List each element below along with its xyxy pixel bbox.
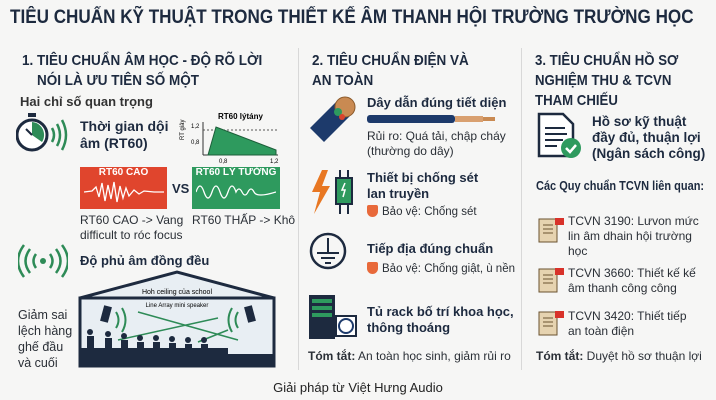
captions: difficult to róc focus	[80, 228, 182, 242]
panel: records	[535, 52, 705, 363]
icon: cable	[310, 96, 356, 142]
text: surge	[367, 170, 478, 201]
captions	[80, 213, 183, 242]
icon: stopwatch	[16, 113, 68, 152]
icon: coverage waves	[18, 244, 68, 278]
protect 1: Bảo vệ: Chống sét	[382, 206, 477, 218]
summary 2: Tóm tắt: An toàn học sinh, giảm rủi ro	[308, 349, 511, 363]
text: reduce deviation: lệch hàng	[18, 324, 72, 338]
item 3: TCVN 3420: Thiết tiếp	[568, 309, 687, 323]
box: RT60 ideal	[192, 167, 280, 209]
box: RT60 high	[80, 167, 167, 209]
vs: VS	[172, 181, 189, 196]
heading 3: THAM CHIẾU	[535, 92, 618, 109]
captions: RT60 CAO -> Vang	[80, 213, 183, 227]
chart: RT60: 1,2	[191, 124, 200, 130]
text: surge: Thiết bị chống sét	[367, 170, 478, 185]
title: TIÊU CHUẨN KỸ THUẬT TRONG THIẾT KẾ ÂM THANH HỘI TRƯỜNG TRƯỜNG HỌC	[10, 7, 694, 28]
text: records	[592, 114, 705, 161]
icon: document check	[538, 112, 581, 158]
summary 3: Tóm tắt: Duyệt hồ sơ thuận lợi	[536, 349, 702, 363]
text: RT60: âm (RT60)	[80, 135, 148, 151]
footer: Giải pháp từ Việt Hưng Audio	[273, 380, 443, 395]
box: RT60 high: RT60 CAO	[99, 167, 148, 178]
protect 2: Bảo vệ: Chống giật, ù nền	[382, 263, 515, 275]
heading 1: 1. TIÊU CHUẨN ÂM HỌC - ĐỘ RÕ LỜI	[22, 52, 262, 69]
icon: rack	[309, 295, 357, 339]
heading 3	[535, 52, 678, 109]
text: surge: lan truyền	[367, 186, 429, 201]
heading 3: NGHIỆM THU & TCVN	[535, 72, 671, 89]
heading 2: AN TOÀN	[312, 72, 373, 89]
text: rack: Tủ rack bố trí khoa học,	[367, 304, 514, 319]
panel: electrical: Rủi ro: Quá tải, chập cháy (thường do dây)	[367, 129, 506, 158]
panel: electrical	[308, 52, 515, 363]
diagram: hall: Hoh ceiling của school	[142, 288, 212, 296]
text: TCVN heading: Các Quy chuẩn TCVN liên quan:	[536, 179, 704, 193]
text: records: (Ngân sách công)	[592, 146, 705, 161]
text: RT60	[80, 118, 168, 151]
icon: ground	[310, 232, 346, 270]
text: coverage: Độ phủ âm đồng đều	[80, 253, 209, 268]
heading 2	[312, 52, 469, 89]
text: reduce deviation: ghế đầu	[18, 340, 63, 354]
chart: RT60	[180, 112, 279, 165]
panel: acoustics	[16, 52, 295, 278]
text: records: Hồ sơ kỹ thuật	[592, 114, 686, 129]
item 1: học	[568, 244, 587, 258]
text: reduce deviation: và cuối	[18, 356, 58, 370]
diagram: hall	[78, 270, 276, 368]
item 1: TCVN 3190: Lưvon mức	[568, 214, 699, 228]
item 3: an toàn điện	[568, 324, 634, 338]
item 1: lin âm dhain hội trường	[568, 229, 692, 243]
panel: acoustics: RT60 THẤP -> Khô	[192, 213, 295, 227]
item 2	[538, 266, 696, 295]
text: records: đầy đủ, thuận lợi	[592, 130, 701, 145]
item 2: âm thanh công công	[568, 281, 677, 295]
icon: lightning surge	[312, 170, 353, 214]
text: RT60: Thời gian dội	[80, 118, 168, 134]
heading 2: 2. TIÊU CHUẨN ĐIỆN VÀ	[312, 52, 469, 69]
text: rack	[367, 304, 514, 335]
item 2: TCVN 3660: Thiết kế kế	[568, 266, 696, 280]
diagram: hall: Line Array mini speaker	[146, 303, 208, 309]
heading 3: 3. TIÊU CHUẨN HỒ SƠ	[535, 52, 678, 69]
icon: wire bar	[367, 115, 495, 123]
text: wire: Dây dẫn đúng tiết diện	[367, 95, 506, 110]
item 1	[538, 214, 699, 258]
chart: RT60: 1,2	[270, 159, 279, 165]
text: reduce deviation: Giảm sai	[18, 308, 67, 322]
chart: RT60: RT60 lýtány	[218, 112, 263, 121]
list: TCVN	[538, 214, 699, 338]
heading 1	[22, 52, 262, 89]
subheading: Hai chỉ số quan trọng	[20, 94, 153, 109]
heading 1: NÓI LÀ ƯU TIÊN SỐ MỘT	[37, 72, 199, 89]
box: RT60 ideal: RT60 LÝ TƯỞNG	[196, 167, 276, 178]
text: ground: Tiếp địa đúng chuẩn	[367, 241, 493, 256]
item 3	[538, 309, 687, 338]
chart: RT60: 0,8	[191, 140, 200, 146]
text: rack: thông thoáng	[367, 320, 450, 335]
chart: RT60: 0,8	[219, 159, 228, 165]
chart: RT60: RT giây	[180, 120, 186, 140]
text: reduce deviation	[18, 308, 72, 370]
